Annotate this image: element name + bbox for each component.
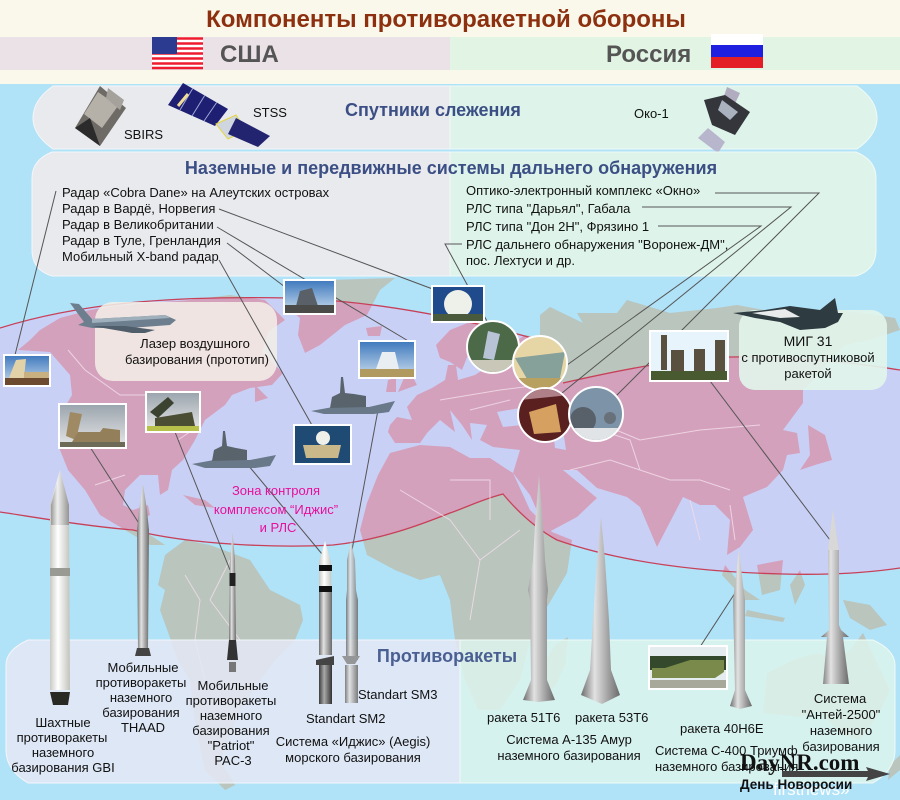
label: Patriot: PAC-3 (214, 753, 252, 768)
label: 53T6: ракета 53Т6 (575, 710, 648, 725)
label: 40N6E: ракета 40Н6Е (680, 721, 764, 736)
heading: USA: США (220, 41, 279, 68)
list: US radars: Радар в Туле, Гренландия (62, 233, 221, 248)
list: Russian radars: РЛС типа "Дарьял", Габала (466, 201, 631, 216)
icon: US flag (152, 37, 203, 69)
label: Patriot: наземного (200, 708, 262, 723)
label: MiG-31: с противоспутниковой (741, 350, 875, 365)
photo: Vardo radome (432, 286, 484, 322)
list: US radars: Радар в Вардё, Норвегия (62, 201, 215, 216)
label: THAAD: THAAD (121, 720, 165, 735)
icon: STSS satellite (168, 83, 270, 147)
label: A-135: Система А-135 Амур (506, 732, 632, 747)
leader lines (15, 191, 830, 650)
zone label: и РЛС (260, 520, 296, 535)
title: Компоненты противоракетной обороны (206, 6, 686, 33)
watermark: firstnews: firstnews» (773, 780, 850, 799)
missile: Antey-2500 (821, 510, 849, 684)
icon: airborne laser plane (70, 303, 176, 333)
label: 51T6: ракета 51Т6 (487, 710, 560, 725)
label: GBI: наземного (32, 745, 94, 760)
heading: early warning: Наземные и передвижные системы дальнего обнаружения (185, 158, 717, 178)
label: GBI (11, 715, 115, 775)
label: GBI: противоракеты (17, 730, 107, 745)
top header band (0, 0, 900, 84)
label: SBIRS: SBIRS (124, 127, 163, 142)
missile: 53T6 (581, 517, 620, 704)
label: Patriot: "Patriot" (208, 738, 255, 753)
interception zone (0, 298, 900, 574)
label: Antey-2500: Система (814, 691, 867, 706)
icon: Aegis ship west (192, 431, 276, 468)
icon: Aegis ship east (311, 377, 395, 414)
label: S-400: Система С-400 Триумф (655, 743, 798, 758)
list: Russian radars: РЛС дальнего обнаружения "Воронеж-ДМ", (466, 237, 728, 252)
photo: Patriot launcher (146, 392, 200, 432)
list: Russian radars: пос. Лехтуси и др. (466, 253, 575, 268)
label: SM3: Standart SM3 (358, 687, 438, 702)
panel: MiG-31 (739, 310, 887, 390)
missile: Patriot (227, 532, 238, 672)
label: MiG-31: ракетой (784, 366, 832, 381)
label: airborne laser: базирования (прототип) (125, 352, 269, 367)
label: airborne laser: Лазер воздушного (140, 336, 250, 351)
photo circle: Daryal (513, 336, 567, 390)
photo: Thule radar (284, 280, 335, 314)
icon: SBIRS satellite (75, 86, 126, 146)
label: S-400: наземного базирования (655, 759, 798, 774)
zone boundary (0, 298, 900, 574)
panel: airborne laser (95, 302, 277, 381)
photo: UK radar (359, 341, 415, 378)
zone label: Зона контроля (232, 483, 320, 498)
photo: X-band sea radar (294, 425, 351, 464)
label: Aegis system (276, 734, 430, 765)
panel: ground and mobile early warning systems (32, 152, 876, 276)
label: S-400 (655, 743, 798, 774)
heading: satellites: Спутники слежения (345, 100, 521, 120)
icon: MiG-31 jet (733, 298, 843, 330)
label: THAAD: противоракеты (96, 675, 186, 690)
photo: S-300 system (650, 331, 728, 381)
photo circle: Don-2N (518, 388, 572, 442)
list: Russian radars: Оптико-электронный комплекс «Окно» (466, 183, 700, 198)
label: A-135: наземного базирования (497, 748, 641, 763)
label: Patriot (186, 678, 276, 768)
photo: THAAD launcher (59, 404, 126, 448)
label: THAAD: базирования (102, 705, 180, 720)
heading: Russia: Россия (606, 41, 691, 68)
missile: Standart SM3 (342, 541, 360, 703)
missile: 51T6 (523, 475, 555, 702)
label: Oko-1: Око-1 (634, 106, 669, 121)
label: MiG-31 (741, 333, 875, 381)
heading: interceptors: Противоракеты (377, 646, 517, 666)
zone label (214, 483, 338, 535)
list: US radars: Радар в Великобритании (62, 217, 214, 232)
watermark: Day of Novorossia: День Новоросии (740, 777, 852, 792)
label: A-135 (497, 732, 641, 763)
photo: S-400 launcher (649, 646, 727, 689)
label: Aegis system: морского базирования (285, 750, 421, 765)
label: Antey-2500: базирования (802, 739, 880, 754)
label: THAAD: наземного (110, 690, 172, 705)
list: US radars: Мобильный X-band радар (62, 249, 219, 264)
label: Patriot: базирования (192, 723, 270, 738)
missile: THAAD (135, 484, 151, 656)
Russia strip (450, 37, 900, 70)
label: STSS: STSS (253, 105, 287, 120)
USA strip (0, 37, 450, 70)
photo circle: Okno (465, 321, 520, 373)
missile: 40N6E (730, 548, 752, 709)
inland seas (497, 408, 566, 450)
watermark: DayNR.com: DayNR.com (740, 750, 859, 775)
list: US radars (62, 185, 330, 264)
list: Russian radars: РЛС типа "Дон 2Н", Фрязино 1 (466, 219, 649, 234)
label: SM2: Standart SM2 (306, 711, 386, 726)
label: Antey-2500: "Антей-2500" (802, 707, 881, 722)
panel: interceptors (6, 640, 895, 783)
zone label: комплексом “Иджис” (214, 502, 338, 517)
photo circle: Voronezh (569, 387, 623, 442)
label: Patriot: Мобильные (197, 678, 269, 693)
label: GBI: базирования GBI (11, 760, 115, 775)
label: airborne laser (125, 336, 269, 367)
icon: Russian flag (711, 34, 763, 68)
panel: satellites (33, 83, 877, 153)
label: Aegis system: Система «Иджис» (Aegis) (276, 734, 430, 749)
country borders (68, 350, 760, 680)
label: Patriot: противоракеты (186, 693, 276, 708)
land outside the zones (18, 278, 900, 790)
world map with interception zones (0, 278, 900, 790)
missile: Standart SM2 (316, 541, 334, 704)
label: MiG-31: МИГ 31 (784, 333, 833, 349)
arrow (782, 767, 890, 781)
list: Russian radars (466, 183, 728, 268)
label: THAAD (96, 660, 186, 735)
missile: GBI (50, 470, 70, 705)
photo: Cobra Dane (4, 355, 50, 386)
label: GBI: Шахтные (35, 715, 91, 730)
label: Antey-2500 (802, 691, 881, 754)
icon: Oko-1 satellite (698, 87, 750, 153)
list: US radars: Радар «Cobra Dane» на Алеутских островах (62, 185, 330, 200)
label: Antey-2500: наземного (810, 723, 872, 738)
label: THAAD: Мобильные (107, 660, 179, 675)
